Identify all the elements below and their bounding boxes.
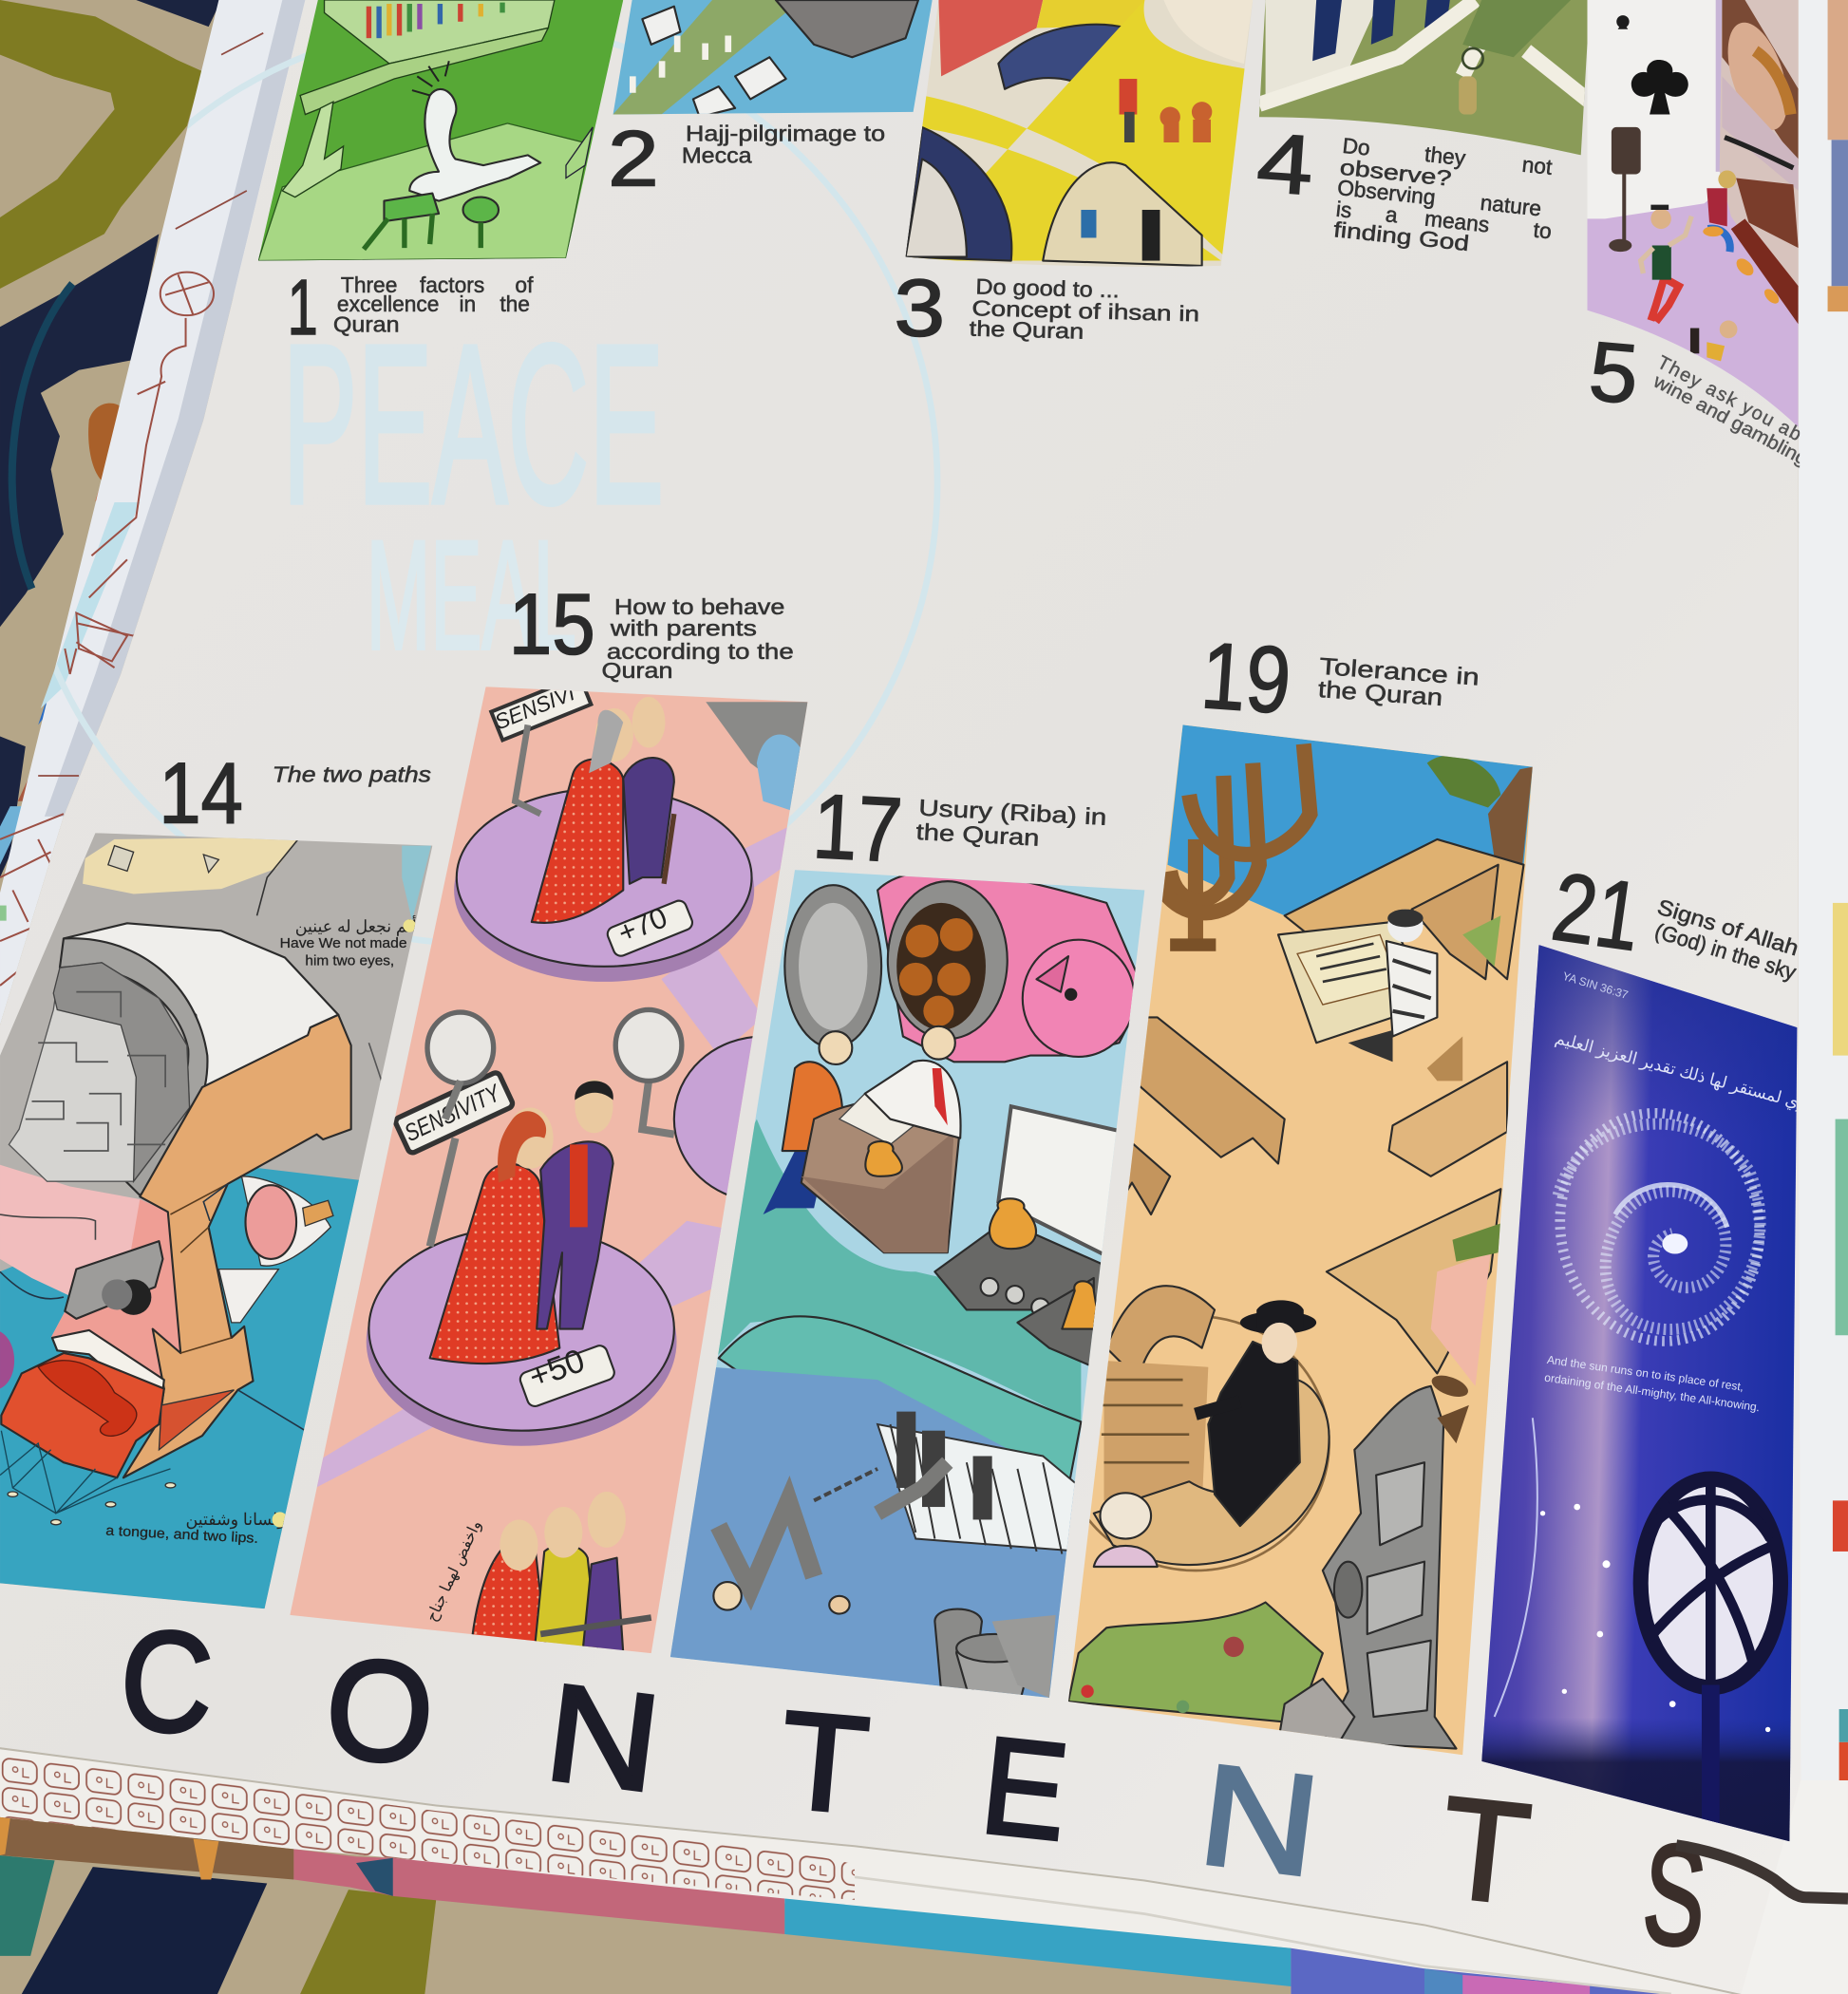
panel 14: the two paths [0, 827, 439, 1615]
item 3 caption [895, 263, 1199, 354]
item 19 caption [1197, 623, 1480, 734]
panel 17: usury (riba) [668, 867, 1151, 1710]
item 1 caption: 1 [288, 263, 318, 351]
item 15 caption: according to the [607, 639, 794, 664]
item 3 caption: Do good to ... [975, 273, 1120, 302]
item 2 caption [608, 115, 885, 203]
item 21 caption: 21 [1546, 852, 1647, 971]
item 5 caption: 5 [1586, 324, 1642, 422]
item 4 caption: 4 [1254, 115, 1316, 213]
item 17 caption: Usury (Riba) in [918, 796, 1107, 831]
item 4 caption: nature [1480, 190, 1542, 220]
panel 21: signs of Allah in the sky: YA SIN 36:37 [1561, 969, 1630, 1002]
item 1 caption [288, 263, 534, 351]
panel 21: signs of Allah in the sky [1481, 945, 1797, 1842]
item 1 caption: of [515, 273, 534, 297]
item 3 caption: Concept of ihsan in [971, 295, 1199, 326]
item 21 caption [1546, 852, 1801, 985]
panel 14: the two paths: a tongue, and two lips. [105, 1524, 258, 1547]
item 19 caption: 19 [1197, 623, 1294, 734]
panel 21: signs of Allah in the sky: ordaining of the All-mighty, the All-knowing. [1543, 1371, 1761, 1414]
heading: CONTENTS: N [1192, 1734, 1328, 1906]
item 1 caption: Three [341, 273, 397, 297]
panel 3: concept of ihsan [903, 0, 1259, 273]
heading: CONTENTS: T [775, 1682, 874, 1843]
item 17 caption: 17 [810, 776, 905, 882]
heading: CONTENTS: E [975, 1707, 1075, 1870]
item 4 caption: Observing [1336, 175, 1437, 210]
item 4 caption: is [1335, 197, 1353, 222]
heading: CONTENTS: S [1638, 1813, 1710, 1976]
panel 21: signs of Allah in the sky: And the sun runs on to its place of rest, [1546, 1353, 1744, 1394]
panel 15: how to behave with parents: SENSIVI [491, 680, 578, 734]
item 2 caption: Mecca [682, 142, 752, 167]
item 5 caption [1591, 342, 1801, 467]
item 4 caption: not [1521, 152, 1554, 179]
stacked pages left edge with line art [0, 0, 344, 1025]
page-edge curl extending from the S [1676, 1845, 1848, 1899]
item 1 caption: the [500, 292, 530, 316]
item 4 caption: observe? [1339, 155, 1453, 191]
item 19 caption: the Quran [1317, 677, 1443, 711]
item 4 caption: finding God [1332, 216, 1470, 255]
watermark: Peace Meal logo [16, 23, 937, 944]
item 15 caption: 15 [509, 576, 595, 672]
panel 15: how to behave with parents: واخفض لهما جناح [423, 1517, 484, 1625]
item 14 caption: 14 [159, 746, 243, 842]
item 14 caption: The two paths [273, 762, 431, 787]
watermark: Peace Meal logo: PEACE [282, 297, 664, 551]
item 1 caption: factors [420, 273, 484, 297]
watermark: Peace Meal logo: MEAL [367, 508, 576, 682]
heading: CONTENTS: O [321, 1627, 439, 1794]
panel 15: how to behave with parents: +50 [524, 1342, 590, 1396]
item 4 caption: a [1385, 201, 1399, 227]
item 4 caption: Do [1341, 133, 1371, 160]
panel 15: how to behave with parents [286, 676, 852, 1657]
item 14 caption [159, 746, 431, 842]
item 15 caption: How to behave [614, 594, 784, 619]
panel 4: do they not observe [1253, 0, 1596, 159]
item 1 caption: Quran [333, 312, 400, 337]
item 17 caption: the Quran [915, 819, 1040, 852]
item 2 caption: 2 [608, 115, 659, 203]
panel 19: tolerance [1062, 723, 1537, 1759]
bottom stacked pages with glyph art [0, 1747, 1741, 1994]
right page white bottom corner [1741, 1780, 1848, 1994]
item 2 caption: Hajj-pilgrimage to [686, 122, 885, 146]
panel 14: the two paths: ألم نجعل له عينين [295, 916, 417, 937]
item 3 caption: the Quran [969, 316, 1084, 344]
heading: CONTENTS [117, 1599, 1710, 1976]
panel 5: wine and gambling [1583, 0, 1806, 432]
panel 15: how to behave with parents: +70 [613, 900, 671, 950]
item 5 caption: wine and gambling [1649, 370, 1811, 470]
heading: CONTENTS: N [538, 1654, 668, 1820]
panel 14: the two paths: Have We not made [280, 936, 407, 951]
item 5 caption: They ask you about [1653, 352, 1832, 461]
item 15 caption: Quran [601, 658, 672, 683]
panel 2: Hajj pilgrimage [611, 0, 941, 121]
item 15 caption: with parents [610, 616, 757, 641]
item 1 caption: excellence [337, 292, 439, 316]
item 21 caption: (God) in the sky [1652, 918, 1800, 985]
item 3 caption: 3 [895, 263, 945, 354]
item 19 caption: Tolerance in [1318, 654, 1480, 691]
item 4 caption: they [1424, 141, 1467, 170]
item 15 caption [509, 576, 794, 683]
item 4 caption: means [1424, 206, 1491, 237]
heading: CONTENTS: C [117, 1599, 217, 1763]
panel 15: how to behave with parents: SENSIVITY [401, 1080, 505, 1147]
item 17 caption [810, 776, 1107, 882]
far-right next page strip [1799, 0, 1848, 1994]
item 1 caption: in [459, 292, 476, 316]
panel 14: the two paths: ولسانا وشفتين [186, 1510, 286, 1530]
item 21 caption: Signs of Allah [1654, 894, 1801, 960]
item 4 caption [1254, 115, 1554, 255]
panel 14: the two paths: him two eyes, [305, 954, 394, 969]
heading: CONTENTS: T [1434, 1766, 1537, 1934]
panel 1: three factors of excellence [255, 0, 636, 267]
item 4 caption: to [1533, 217, 1553, 243]
